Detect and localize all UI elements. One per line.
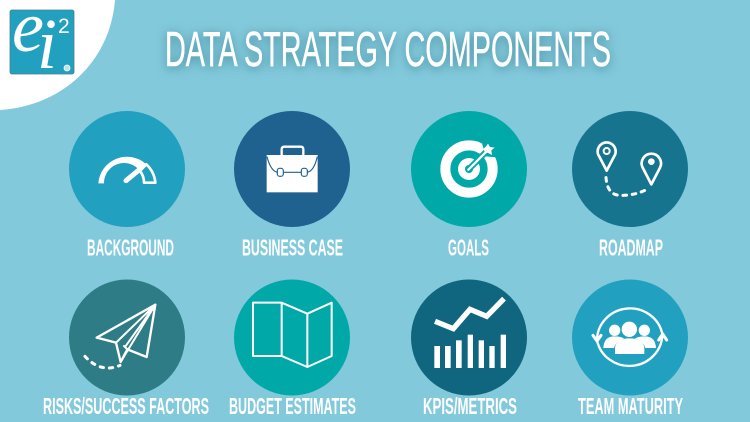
logo [10, 0, 74, 84]
component: business case [234, 111, 350, 260]
component: risks/success factors: RISKS/SUCCESS FACTORS [43, 393, 209, 419]
component: goals [411, 111, 527, 260]
component: kpis/metrics: KPIS/METRICS [423, 393, 517, 419]
component: background: BACKGROUND [87, 234, 174, 260]
component: roadmap: ROADMAP [599, 234, 663, 260]
component: risks/success factors [43, 280, 209, 419]
logo: i [37, 4, 57, 84]
component: team maturity [572, 280, 688, 419]
component: kpis/metrics [411, 280, 527, 419]
white corner [0, 0, 115, 110]
logo: 2 [58, 15, 70, 38]
component: budget estimates: BUDGET ESTIMATES [229, 393, 356, 419]
component: roadmap [572, 111, 688, 260]
component: budget estimates [229, 280, 356, 419]
component: goals: GOALS [448, 234, 489, 260]
component: background [69, 111, 185, 260]
component: business case: BUSINESS CASE [242, 234, 343, 260]
